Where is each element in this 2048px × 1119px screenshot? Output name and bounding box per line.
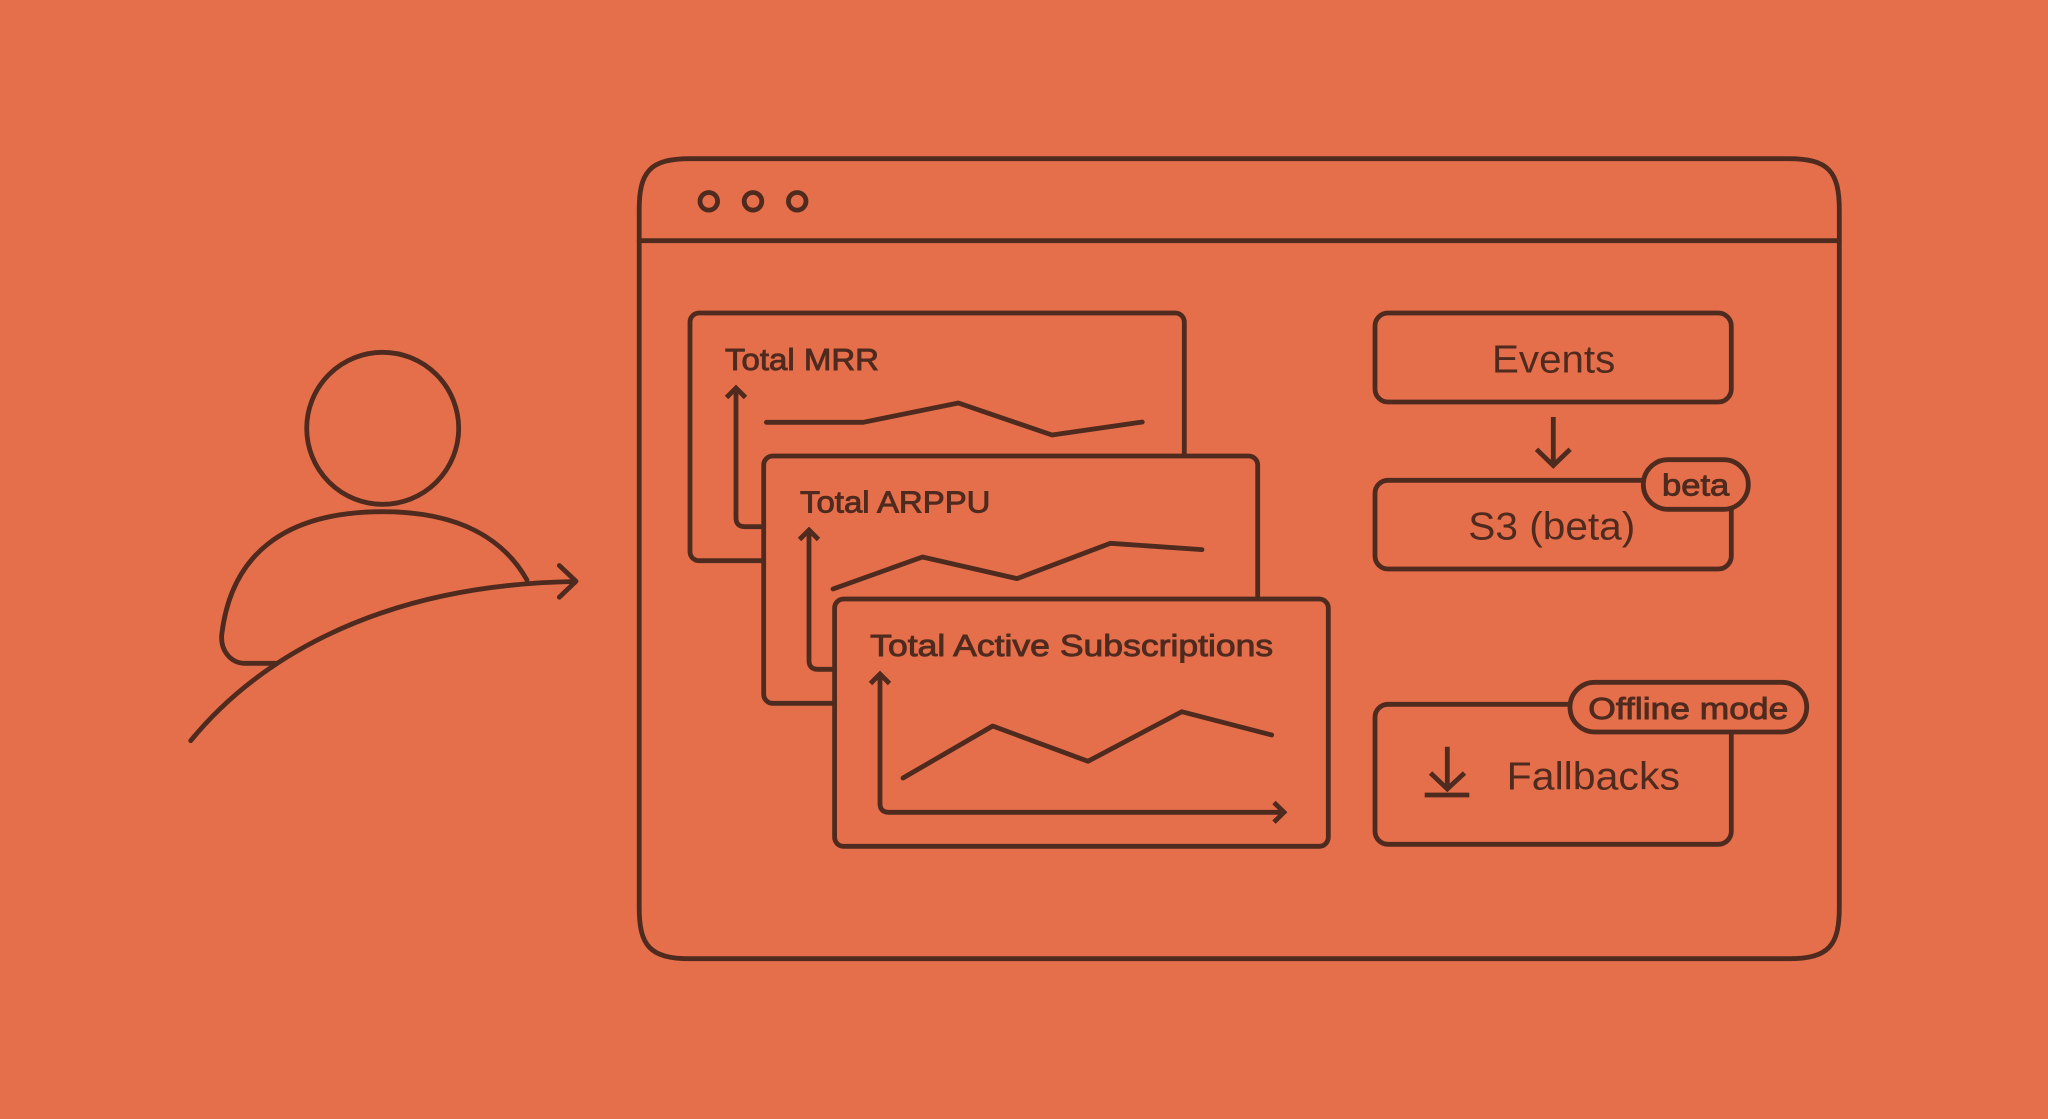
- panel: Fallbacks box: [1375, 682, 1807, 844]
- user body: [222, 512, 527, 663]
- window header divider: [639, 238, 1839, 243]
- card title: Total MRR: [725, 342, 879, 377]
- badge: Offline mode: Offline mode: [1588, 691, 1788, 726]
- window frame: [639, 159, 1839, 959]
- badge: beta: beta: [1662, 468, 1730, 503]
- icon: download: [1425, 747, 1469, 795]
- card outline: [835, 599, 1328, 846]
- box outline: [1375, 480, 1731, 569]
- box outline: [1375, 704, 1731, 844]
- icon: user with curved arrow: [191, 352, 576, 741]
- box label: Fallbacks: [1507, 755, 1680, 798]
- card title: Total Active Subscriptions: [870, 628, 1273, 663]
- chart axes: [800, 530, 860, 669]
- chart axes: [726, 388, 800, 527]
- box label: S3 (beta): [1468, 505, 1635, 548]
- line series: [833, 543, 1202, 589]
- arrow: Events to S3: [1536, 417, 1570, 466]
- panel: app window: [639, 159, 1839, 959]
- badge: Offline mode: [1570, 682, 1807, 732]
- panel: Total Active Subscriptions chart card: [835, 599, 1328, 846]
- badge: beta: [1643, 460, 1748, 509]
- window control dots: [700, 192, 806, 210]
- panel: Total MRR chart card: [690, 313, 1184, 561]
- curved arrow: [191, 566, 576, 741]
- card outline: [690, 313, 1184, 561]
- card outline: [764, 456, 1258, 703]
- card title: Total ARPPU: [800, 485, 990, 520]
- chart axes: [870, 674, 1284, 822]
- line series: [903, 712, 1272, 778]
- user head: [307, 352, 459, 504]
- line series: [766, 403, 1142, 435]
- panel: Events box: [1375, 313, 1731, 402]
- panel: Total ARPPU chart card: [764, 456, 1258, 703]
- panel: S3 box: [1375, 460, 1748, 569]
- box label: Events: [1492, 338, 1615, 381]
- box outline: [1375, 313, 1731, 402]
